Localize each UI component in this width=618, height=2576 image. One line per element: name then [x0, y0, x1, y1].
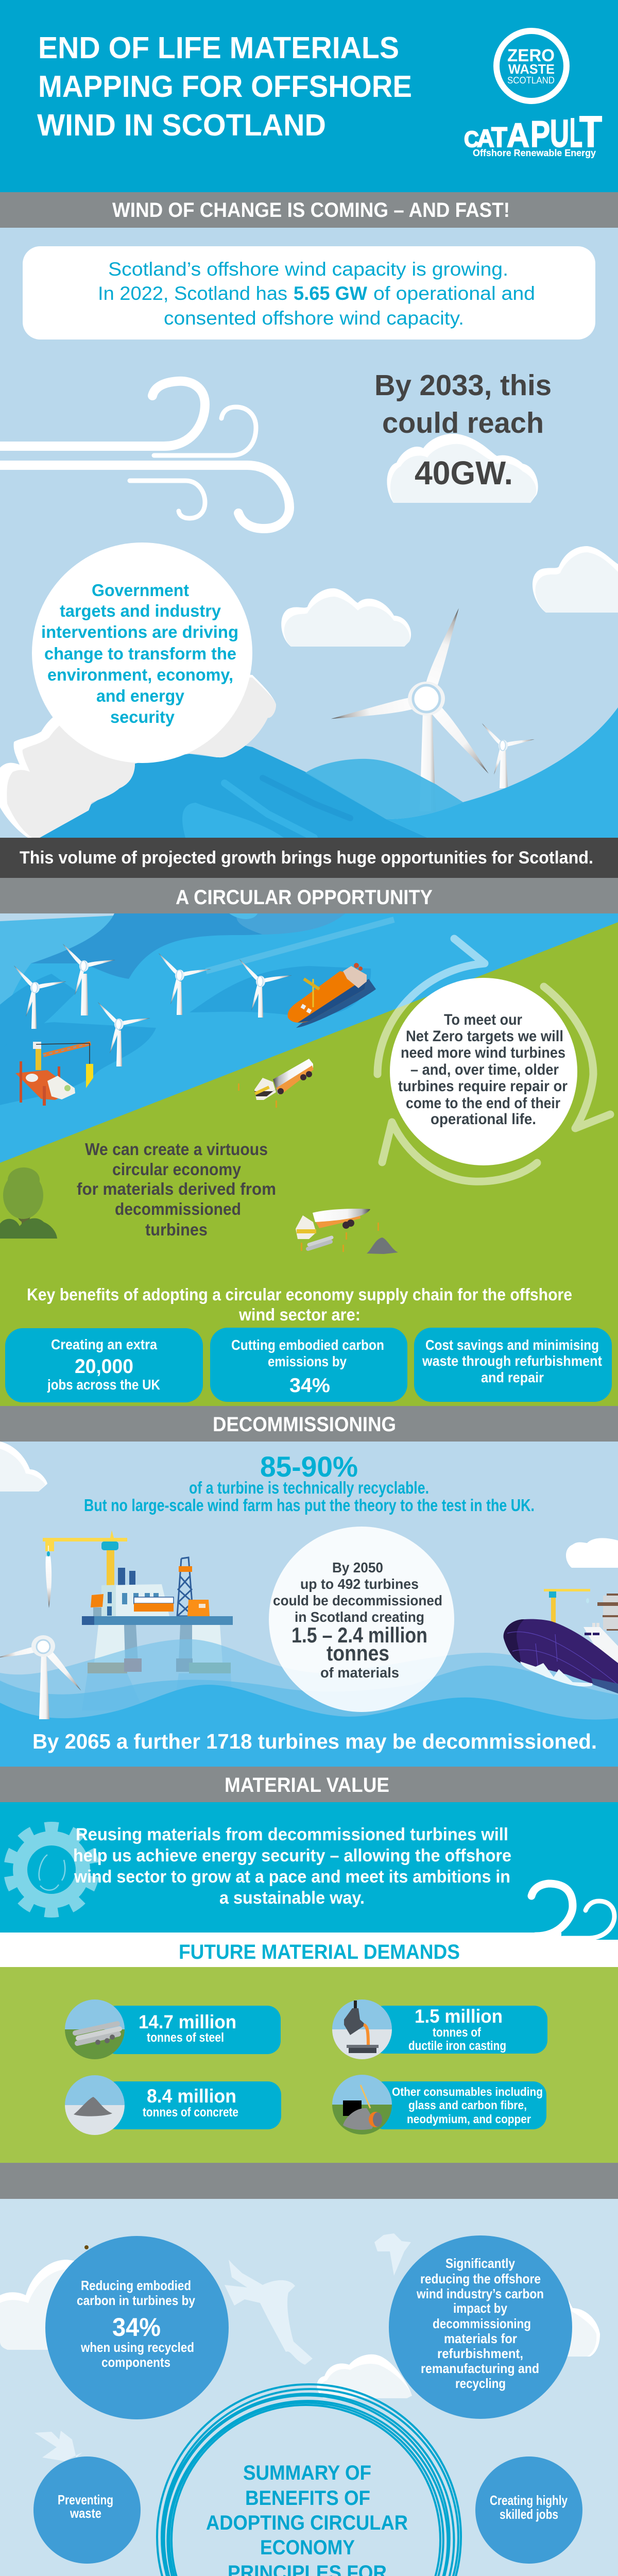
icon: ship with crane: [504, 1589, 618, 1693]
callout: net zero: need more wind turbines: [401, 1044, 565, 1061]
benefit: skilled jobs: skilled jobs: [500, 2506, 558, 2522]
card: carbon: Cutting embodied carbon: [231, 1337, 384, 1353]
callout: net zero: operational life.: [431, 1111, 536, 1128]
cloud top left: [0, 1442, 47, 1492]
card: jobs: 20,000: [75, 1355, 133, 1378]
panel: future material demands: [0, 1967, 618, 2163]
heading: summary: BENEFITS OF: [245, 2487, 370, 2510]
icon: cargo ship: [288, 963, 376, 1028]
logo: Zero Waste Scotland: ZERO: [507, 46, 555, 65]
icon: jack-up vessel: [15, 1042, 93, 1106]
text: reusing materials: help us achieve energy security – allowing the offshore: [73, 1846, 511, 1866]
callout: 2050 forecast: of materials: [320, 1665, 399, 1681]
headline: by 2033: could reach: [382, 406, 544, 439]
benefit: embodied carbon: components: [101, 2354, 170, 2370]
text: key benefits heading: [27, 1285, 572, 1324]
text: virtuous circular economy: We can create a virtuous: [85, 1140, 268, 1159]
benefit: embodied carbon: [45, 2236, 229, 2419]
callout: government targets: change to transform the: [44, 644, 236, 663]
benefit: preventing waste: Preventing: [58, 2492, 113, 2507]
text box: capacity statement: Scotland’s offshore wind capacity is growing.: [108, 259, 508, 280]
stat: ductile iron: [332, 1999, 547, 2059]
card: cost savings: [414, 1328, 612, 1402]
benefit: carbon impact: recycling: [455, 2376, 506, 2391]
section bar: wind of change: WIND OF CHANGE IS COMING – AND FAST!: [112, 199, 510, 222]
icon: blade on crane: [43, 1530, 127, 1608]
text: reusing materials: wind sector to grow at a pace and meet its ambitions in: [74, 1867, 510, 1887]
icon: decommissioned turbine: [0, 1635, 84, 1719]
icon: truck carrying blade: [238, 1059, 314, 1108]
panel: offshore wind capacity growth: [0, 228, 618, 838]
section bar: decommissioning: DECOMMISSIONING: [213, 1413, 396, 1436]
text: reusing materials: Reusing materials from decommissioned turbines will: [76, 1825, 508, 1844]
cloud behind 40GW: [387, 434, 538, 503]
waves: [0, 1639, 618, 1767]
title: MAPPING FOR OFFSHORE: [38, 70, 412, 104]
callout: 2050 forecast: could be decommissioned: [273, 1592, 442, 1608]
headline: by 2033: By 2033, this: [374, 369, 552, 402]
stat: steel: tonnes of steel: [147, 2030, 224, 2045]
card: cost savings: and repair: [481, 1369, 544, 1385]
callout: government targets: Government: [92, 581, 189, 600]
turbine large: [330, 606, 494, 811]
stat: ductile iron: tonnes of: [433, 2025, 482, 2040]
cloud top right: [566, 1538, 618, 1568]
benefit: preventing waste: waste: [70, 2505, 101, 2521]
icon: iron casting ladle: [332, 1999, 392, 2059]
stat: concrete: tonnes of concrete: [143, 2105, 238, 2120]
benefit: carbon impact: decommissioning: [433, 2316, 531, 2331]
card: carbon: emissions by: [268, 1353, 347, 1369]
text: virtuous circular economy: [77, 1140, 276, 1239]
callout: government targets: [32, 543, 252, 763]
icon: aggregate pile: [367, 1238, 398, 1254]
panel: summary of benefits: [0, 2199, 618, 2576]
callout: net zero: Net Zero targets we will: [406, 1028, 563, 1045]
panel: circular opportunity: [0, 913, 618, 1406]
callout: 2050 forecast: By 2050: [332, 1560, 383, 1575]
benefit: skilled jobs: Creating highly: [490, 2493, 568, 2508]
icon: birds: [35, 2233, 411, 2461]
callout: 2050 forecast: [269, 1527, 454, 1712]
logo: Zero Waste Scotland: SCOTLAND: [507, 75, 555, 86]
mountains: [40, 707, 618, 838]
text: reusing materials: [73, 1825, 511, 1908]
empty section bar: [0, 2163, 618, 2199]
card: jobs: jobs across the UK: [47, 1377, 160, 1393]
callout: net zero: come to the end of their: [406, 1095, 560, 1112]
section bar: material value: MATERIAL VALUE: [225, 1774, 389, 1797]
stat: other consumables: [332, 2075, 546, 2134]
headline: by 2033: [374, 369, 552, 492]
icon: gear: [3, 1821, 100, 1919]
banner: projected growth: [0, 838, 618, 878]
callout: 2050 forecast: up to 492 turbines: [300, 1576, 419, 1592]
panel: future material demands heading: FUTURE MATERIAL DEMANDS: [179, 1941, 460, 1963]
stat: other consumables: neodymium, and copper: [407, 2112, 531, 2126]
benefit: carbon impact: refurbishment,: [437, 2346, 523, 2361]
benefit: preventing waste: [33, 2456, 141, 2564]
card: jobs: Creating an extra: [51, 1336, 157, 1352]
callout: government targets: environment, economy,: [47, 665, 233, 684]
benefit: carbon impact: wind industry’s carbon: [416, 2286, 544, 2301]
stat: 85-90%: [84, 1450, 535, 1515]
section bar: decommissioning: [0, 1406, 618, 1442]
summary ring scribble: [148, 2379, 468, 2576]
text: reusing materials: a sustainable way.: [219, 1888, 365, 1908]
panel: decommissioning: [0, 1442, 618, 1767]
stat: other consumables: glass and carbon fibre,: [408, 2098, 527, 2112]
text: virtuous circular economy: for materials derived from: [77, 1179, 276, 1198]
text: virtuous circular economy: circular economy: [112, 1160, 242, 1179]
icon: wind swirl: [531, 1884, 614, 1938]
stat: 85-90%: 85-90%: [260, 1450, 358, 1483]
callout: 2050 forecast: tonnes: [327, 1641, 389, 1665]
logo: Zero Waste Scotland: WASTE: [508, 61, 555, 77]
benefit: skilled jobs: [475, 2456, 582, 2564]
icon: steel pipes: [65, 1999, 125, 2059]
heading: summary: ECONOMY: [260, 2536, 355, 2559]
section bar: material value: [0, 1767, 618, 1802]
card: carbon: 34%: [289, 1375, 330, 1397]
icon: offshore platform: [82, 1557, 233, 1710]
callout: net zero: turbines require repair or: [398, 1078, 568, 1095]
stat: steel: [65, 1999, 281, 2059]
title: WIND IN SCOTLAND: [37, 108, 326, 142]
callout: net zero: To meet our: [444, 1011, 522, 1028]
sea area: [0, 913, 618, 1163]
section bar: a circular opportunity: A CIRCULAR OPPORTUNITY: [176, 886, 433, 909]
benefit: carbon impact: reducing the offshore: [420, 2271, 541, 2286]
icon: consumables: [332, 2075, 392, 2134]
benefit: embodied carbon: when using recycled: [80, 2340, 194, 2355]
card: carbon: [210, 1328, 407, 1402]
benefit: carbon impact: remanufacturing and: [421, 2361, 539, 2376]
section bar: wind of change: [0, 192, 618, 228]
benefit: carbon impact: impact by: [453, 2300, 507, 2316]
card: jobs: [5, 1328, 203, 1402]
text box: capacity statement: In 2022, Scotland has: [98, 283, 287, 304]
callout: 2050 forecast: in Scotland creating: [295, 1609, 424, 1625]
benefit: carbon impact: [389, 2235, 572, 2419]
heading: summary: ADOPTING CIRCULAR: [206, 2512, 408, 2534]
stat: other consumables: Other consumables including: [392, 2085, 543, 2098]
section bar: a circular opportunity: [0, 878, 618, 913]
icon: tree: [0, 1167, 57, 1239]
headline: by 2033: 40GW.: [415, 454, 513, 492]
text: virtuous circular economy: turbines: [145, 1220, 208, 1239]
stat: 85-90%: of a turbine is technically recyclable.: [189, 1478, 429, 1497]
callout: net zero: [390, 978, 577, 1165]
text: virtuous circular economy: decommissioned: [115, 1199, 241, 1218]
text: key benefits heading: Key benefits of adopting a circular economy supply chain for the offshore: [27, 1285, 572, 1304]
cloud right: [533, 546, 618, 613]
icon: circular arrows: [377, 939, 610, 1181]
logo: Catapult Offshore Renewable Energy: [464, 108, 602, 158]
cloud: [281, 588, 411, 647]
callout: 2050 forecast: 1.5 – 2.4 million: [291, 1623, 427, 1647]
text: by 2065: By 2065 a further 1718 turbines may be decommissioned.: [32, 1730, 597, 1753]
callout: government targets: interventions are driving: [41, 622, 238, 641]
benefit: embodied carbon: 34%: [112, 2313, 161, 2342]
callout: government targets: targets and industry: [60, 601, 221, 620]
text box: capacity statement: [23, 246, 595, 340]
stat: ductile iron: 1.5 million: [415, 2006, 503, 2027]
text box: capacity statement: of operational and: [373, 283, 535, 304]
cloud grey: [0, 670, 276, 838]
title: END OF LIFE MATERIALS: [38, 31, 399, 65]
benefit: embodied carbon: carbon in turbines by: [77, 2293, 195, 2308]
icon: truck carrying blade 2: [296, 1209, 379, 1240]
text box: capacity statement: consented offshore wind capacity.: [164, 308, 464, 329]
icon: pile of pipes: [301, 1238, 344, 1252]
stat: concrete: 8.4 million: [147, 2086, 236, 2107]
heading: summary: SUMMARY OF: [243, 2462, 371, 2484]
stat: steel: 14.7 million: [139, 2011, 236, 2032]
card: cost savings: waste through refurbishment: [422, 1353, 602, 1369]
panel: material value: [0, 1802, 618, 1940]
panel: future material demands heading: [0, 1933, 618, 1967]
clouds: [0, 2260, 600, 2398]
icon: concrete pile: [65, 2075, 125, 2135]
turbine small: [480, 722, 535, 788]
banner: projected growth: This volume of projected growth brings huge opportunities for Scotland.: [20, 848, 593, 868]
benefit: carbon impact: materials for: [444, 2331, 517, 2346]
title: [37, 31, 412, 142]
callout: government targets: and energy: [96, 686, 185, 705]
text: key benefits heading: wind sector are:: [238, 1305, 360, 1324]
stat: concrete: [65, 2075, 281, 2135]
callout: government targets: security: [110, 707, 175, 726]
stat: ductile iron: ductile iron casting: [408, 2039, 506, 2053]
callout: net zero: – and, over time, older: [410, 1061, 559, 1078]
benefit: carbon impact: Significantly: [445, 2256, 515, 2271]
header band: [0, 0, 618, 192]
icon: wind swirls: [0, 381, 289, 529]
logo: Zero Waste Scotland: [496, 31, 566, 101]
heading: summary: [206, 2462, 408, 2576]
turbines offshore: [12, 943, 293, 1066]
benefit: embodied carbon: Reducing embodied: [81, 2278, 191, 2293]
text box: capacity statement: 5.65 GW: [294, 283, 367, 304]
